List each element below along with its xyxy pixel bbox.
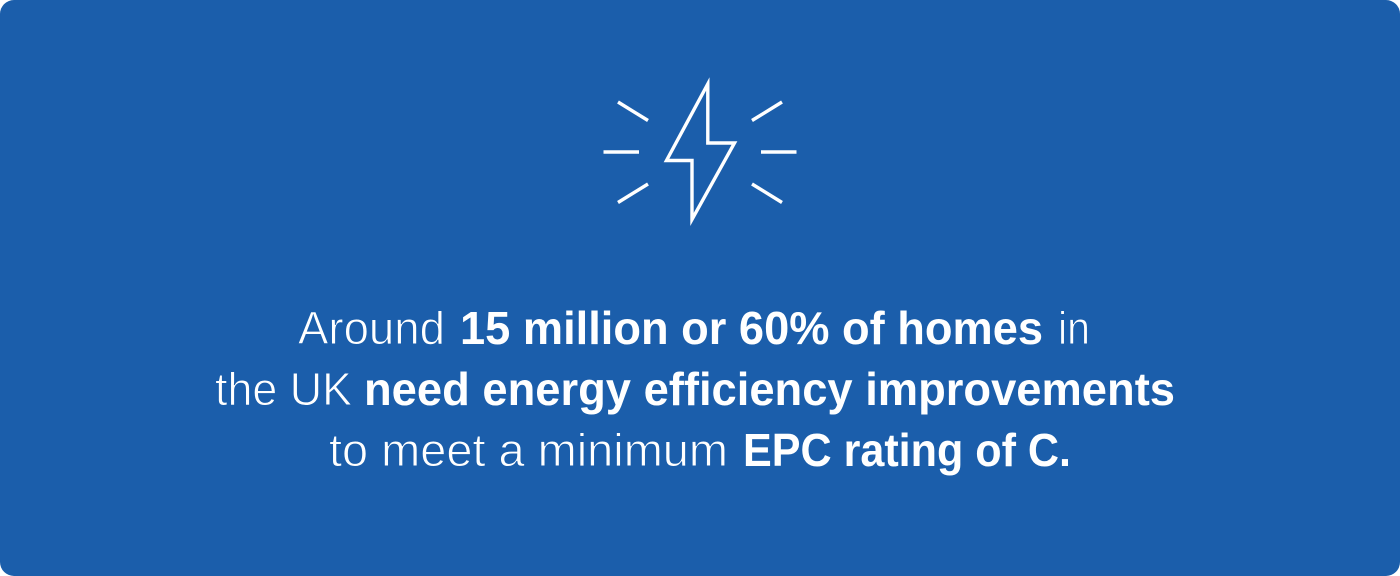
icon: lightning bolt with rays (604, 84, 796, 220)
text line 2: the UK (215, 363, 352, 415)
text line 3: to meet a minimum (329, 424, 728, 476)
text line 2: need energy efficiency improvements (364, 363, 1175, 415)
icon: lightning bolt (666, 84, 734, 220)
text block: main statement (215, 302, 1175, 476)
text line 3 (329, 424, 1071, 476)
text line 1: 15 million or 60% of homes (460, 302, 1043, 354)
icon: rays (604, 102, 796, 202)
text line 3: EPC rating of C. (743, 424, 1071, 476)
text line 1: in (1058, 302, 1090, 354)
text line 1: Around (298, 302, 445, 354)
